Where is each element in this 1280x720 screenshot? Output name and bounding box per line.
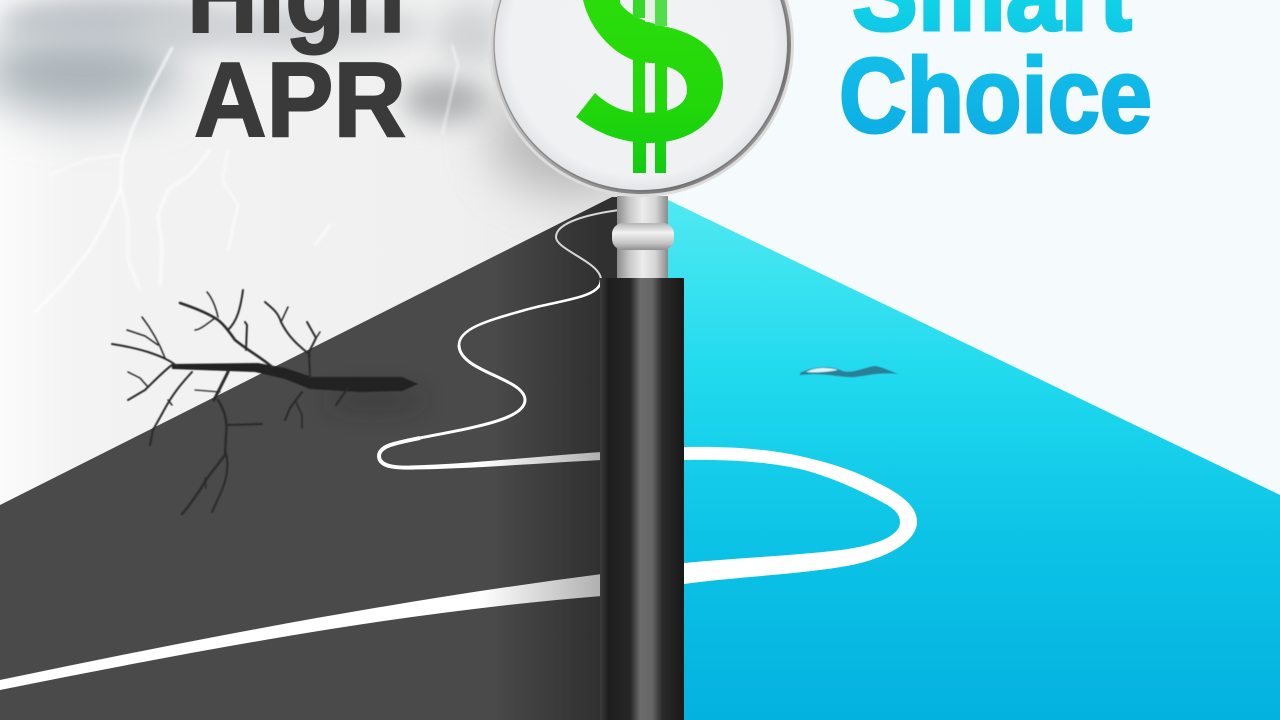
heading: High APR	[187, 0, 406, 159]
dead tree	[112, 290, 418, 514]
bright road loop right	[684, 447, 917, 584]
heading: High APR: APR	[194, 41, 406, 159]
heading: Smart Choice: Choice	[839, 37, 1152, 155]
magnifier handle	[600, 278, 684, 720]
dollar sign: $	[640, 31, 654, 58]
background: bright right side	[641, 0, 1280, 720]
lightning bolts	[35, 45, 458, 312]
dark road panel: high APR path	[0, 197, 641, 720]
heading: Smart Choice	[839, 0, 1152, 155]
magnifier metal neck	[612, 196, 674, 280]
winding thin road	[379, 210, 619, 470]
cyan road panel: smart choice path	[641, 197, 1280, 720]
background: stormy left side	[0, 0, 641, 720]
magnifying glass	[488, 0, 794, 720]
magnifier lens	[488, 0, 794, 197]
trunk shadow	[325, 391, 425, 409]
lens drop shadow	[490, 85, 650, 195]
dollar sign	[576, 0, 723, 173]
storm clouds	[0, 0, 504, 122]
wide foreground road left	[0, 574, 602, 690]
small wave mark	[800, 366, 898, 377]
